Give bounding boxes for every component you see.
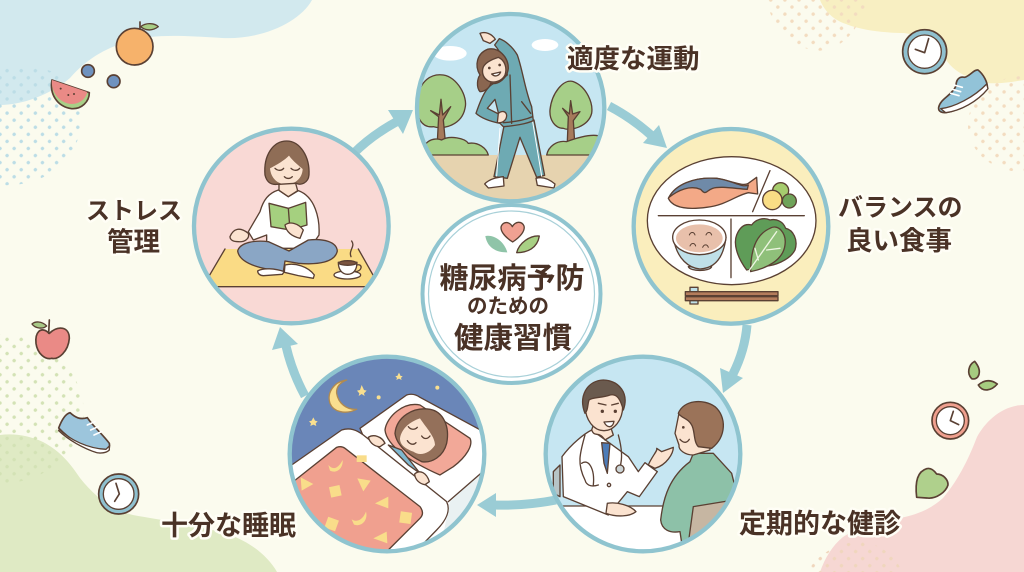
panel: medical checkup illustration: [543, 355, 743, 554]
woman stretching: [476, 33, 555, 188]
decor icon: shoe top right: [939, 70, 988, 113]
clouds: [433, 39, 558, 61]
background blob: blue top left: [0, 0, 312, 105]
chopsticks: [685, 287, 778, 304]
dot pattern: top right: [766, 0, 866, 51]
patient: [661, 402, 737, 554]
bushes: [423, 135, 602, 155]
hands: [368, 436, 429, 485]
label: balanced diet: [838, 194, 963, 256]
arrow: sleep to stress: [272, 327, 305, 396]
rice bowl: [673, 220, 726, 270]
dot pattern: bottom right: [808, 542, 902, 572]
background blob: pink bottom right: [820, 405, 1024, 572]
center badge: 健康習慣: [454, 322, 572, 355]
label: stress: [86, 198, 182, 257]
pillow: [385, 405, 471, 475]
label: checkup: 定期的な健診: [739, 509, 901, 539]
label: stress: 管理: [107, 227, 160, 257]
decor icon: leaves right: [969, 361, 997, 390]
arrow: checkup to sleep: [477, 493, 556, 517]
dot pattern: top left: [0, 66, 82, 185]
duvet: [292, 429, 448, 554]
decor icon: clock bottom left: [99, 474, 139, 514]
side dish: [763, 183, 796, 210]
decor icon: watermelon: [51, 80, 89, 109]
decor icon: clock top right: [903, 30, 947, 74]
label: exercise: 適度な運動: [567, 44, 700, 74]
decor icon: blueberries: [82, 65, 120, 88]
woman reading: [230, 141, 337, 278]
sleeping woman: [388, 409, 447, 473]
decor icon: apple: [32, 320, 69, 359]
arrow: stress to exercise: [354, 110, 413, 153]
ground: [432, 155, 588, 200]
label: balanced diet: バランスの: [838, 194, 963, 222]
bed: [359, 394, 482, 540]
dot pattern: left edge: [0, 334, 84, 484]
dot pattern: right edge: [968, 76, 1024, 172]
panel: exercise illustration: [415, 13, 607, 203]
center badge: のための: [467, 295, 549, 318]
panel: stress management illustration: [194, 129, 389, 323]
yellow mat: [208, 249, 374, 287]
center badge: [422, 205, 600, 383]
lettuce: [735, 219, 796, 272]
doctor: [562, 380, 673, 516]
background blob: green bottom left: [0, 434, 277, 572]
doctor chair: [553, 465, 560, 497]
label: balanced diet: 良い食事: [846, 226, 952, 256]
icon: heart and leaves: [485, 222, 539, 253]
title text: 糖尿病予防: [439, 262, 585, 295]
plate: [647, 157, 816, 285]
tea cup: [334, 241, 361, 279]
arrow: food to checkup: [720, 325, 747, 393]
panel: sleep illustration: [287, 355, 487, 554]
moon and stars: [309, 373, 439, 426]
decor icon: heart leaf: [916, 468, 948, 498]
decor icon: clock right: [932, 402, 969, 439]
table: [562, 505, 681, 550]
panel: balanced diet illustration: [634, 129, 828, 324]
decor icon: shoe left: [59, 413, 110, 453]
arrow: exercise to food: [609, 106, 667, 148]
background blob: yellow top right: [820, 0, 1024, 83]
right tree: [550, 81, 592, 142]
decor icon: orange: [116, 22, 158, 65]
left tree: [416, 75, 466, 142]
label: stress: ストレス: [86, 198, 182, 225]
label: sleep: 十分な睡眠: [161, 511, 296, 541]
salmon: [668, 177, 758, 208]
